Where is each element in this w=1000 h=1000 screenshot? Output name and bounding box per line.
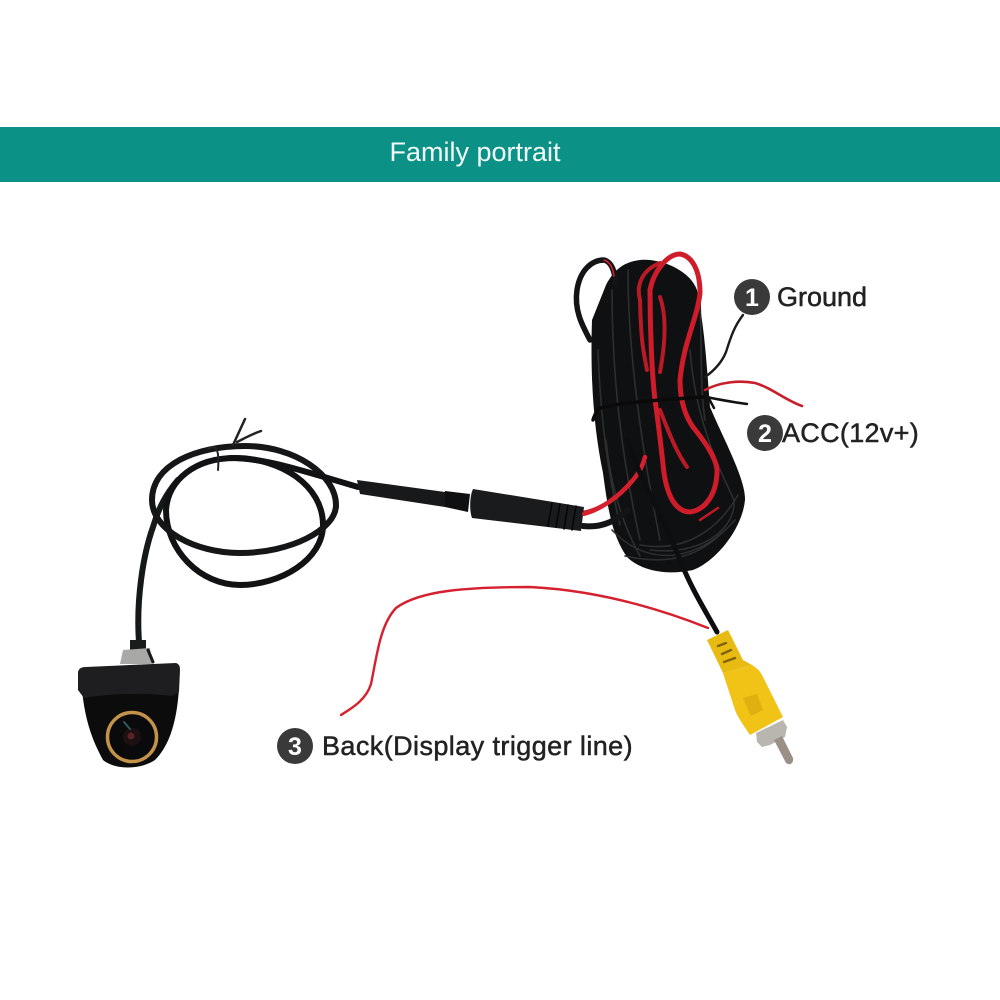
ACC wire — [705, 382, 802, 406]
camera cable with loops — [138, 419, 358, 642]
callout 1: Ground: 1 — [745, 284, 759, 312]
title: Family portrait — [389, 137, 561, 167]
trigger wire — [341, 587, 708, 715]
callout 1: Ground — [734, 279, 867, 315]
callout 2: ACC: 2 — [758, 420, 772, 448]
callout 1: Ground: Ground — [777, 282, 867, 312]
header banner — [0, 127, 1000, 182]
ground wire — [705, 315, 743, 377]
camera — [78, 640, 180, 768]
callout 3: Back: 3 — [288, 733, 302, 761]
callout 3: Back: Back(Display trigger line) — [322, 731, 633, 761]
callout 2: ACC: ACC(12v+) — [782, 418, 919, 448]
callout 2: ACC — [747, 415, 919, 451]
RCA plug — [707, 630, 793, 764]
video cable to RCA — [627, 440, 717, 632]
wire coil — [576, 254, 747, 572]
connector — [357, 480, 606, 531]
